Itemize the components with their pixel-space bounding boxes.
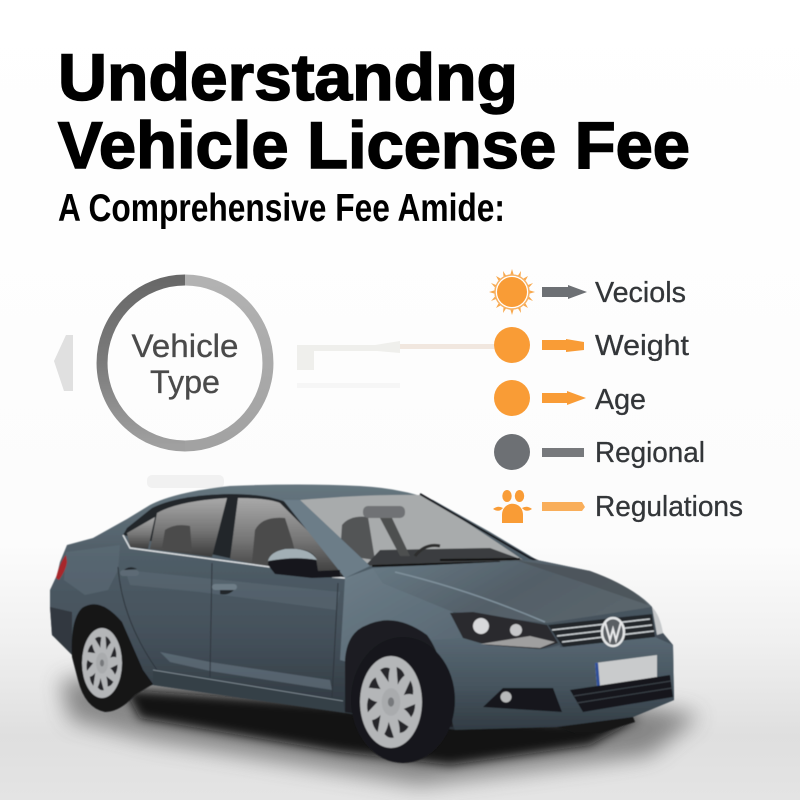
subtitle: A Comprehensive Fee Amide:: [58, 187, 505, 230]
rear wheel: [72, 604, 153, 712]
arrow: [542, 339, 584, 352]
rear quarter panel highlight: [64, 545, 120, 595]
icon: grey circle: [494, 434, 530, 470]
icon: orange circle: [494, 380, 530, 416]
headlight: [450, 612, 558, 649]
faded left chevron: [54, 335, 73, 391]
bar: [542, 448, 584, 457]
bar: [542, 502, 585, 511]
arrow: [542, 285, 587, 299]
label: Regulations: [595, 491, 743, 523]
faded connector arrow: [297, 341, 494, 388]
title: Vehicle License Fee: [58, 108, 690, 182]
license plate: [595, 655, 657, 687]
label: Regional: [595, 437, 705, 469]
factor: Weight: [494, 327, 689, 363]
factor: Regulations: [493, 490, 743, 523]
door highlight: [160, 652, 332, 690]
ring label: Vehicle: [132, 328, 238, 364]
hood: [373, 560, 652, 623]
windshield interior: [340, 506, 523, 566]
front door glass: [230, 498, 343, 575]
door lines: [118, 563, 338, 697]
icon: orange circle: [494, 327, 530, 363]
windshield dark edge: [420, 494, 538, 561]
windshield: [300, 495, 523, 566]
label: Weight: [595, 330, 689, 362]
front bumper: [430, 637, 674, 730]
side mirror: [268, 549, 340, 578]
ring label: Type: [150, 364, 220, 400]
under bumper: [557, 717, 635, 733]
icon: paw: [493, 490, 532, 523]
seats: [162, 518, 300, 570]
title: Understandng: [58, 40, 518, 114]
factor: Veciols: [489, 269, 686, 315]
icon: sun: [489, 269, 535, 315]
factor: Age: [494, 380, 646, 416]
door handles: [120, 567, 237, 594]
label: Age: [595, 384, 646, 416]
car shadow: [60, 670, 700, 785]
wipers: [372, 559, 520, 566]
logo: [602, 618, 624, 646]
car: [50, 484, 674, 763]
faded bar under ring: [147, 475, 224, 488]
A pillar: [283, 500, 370, 578]
right lamp: [652, 607, 663, 635]
fog lamp: [483, 688, 562, 712]
front fender: [340, 568, 560, 690]
rear bumper shade: [50, 607, 72, 655]
rear quarter glass: [127, 517, 155, 549]
window frame: [123, 494, 345, 578]
arrow: [542, 391, 586, 405]
title: [58, 40, 690, 182]
chrome trim: [123, 535, 270, 567]
sill: [153, 670, 345, 713]
ring label: [132, 328, 238, 400]
factor: Regional: [494, 434, 705, 470]
front wheel: [345, 620, 455, 763]
vehicle type ring: [102, 280, 268, 446]
rear door glass: [150, 498, 227, 557]
grille: [548, 614, 655, 647]
tail light: [56, 555, 67, 580]
lower grille: [570, 675, 673, 712]
car body: [50, 484, 674, 730]
label: Veciols: [595, 277, 686, 309]
